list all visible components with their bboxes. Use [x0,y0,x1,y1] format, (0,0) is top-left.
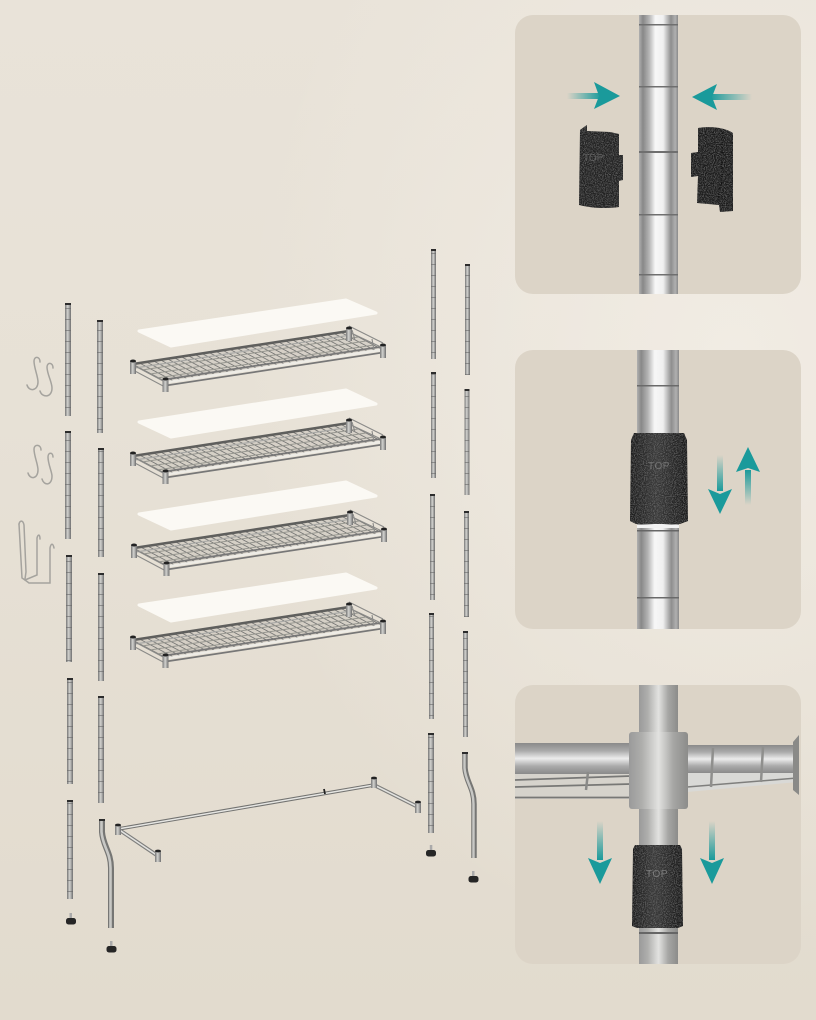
pole column: far right [462,264,478,882]
bent bottom pole [462,752,474,858]
arrow: down [700,821,724,884]
black sleeve [630,433,688,524]
icon: S hook 3 [28,445,41,478]
panel: clip halves attach [515,15,801,294]
corner post [371,777,377,788]
pole segment [431,372,436,478]
pole segment [97,320,103,433]
liner 2 [139,390,376,437]
left clip half [579,125,623,208]
sleeve marking: TOP [648,461,670,472]
panel background [515,685,801,964]
pole segment [67,678,73,784]
chrome shelf rail left [515,743,631,799]
pole segment [430,494,435,600]
pole segment [98,448,104,557]
pole segment [65,431,71,539]
chrome pole [637,350,679,629]
icon: S hook 1 [27,357,40,390]
icon: S hook 4 [42,453,53,484]
chrome pole [639,685,678,964]
pole segment [98,573,104,681]
pole segment [65,303,71,416]
arrow: down [708,455,732,514]
pole segment [431,249,436,359]
foot [66,913,76,924]
panel background [515,15,801,294]
wire shelf 2 [130,418,386,484]
panel: slide sleeve into place [515,350,801,629]
corner post [415,801,421,813]
icon: basket hook [19,521,54,583]
hooks [19,357,54,583]
arrow: down [588,821,612,884]
arrow: left [692,84,752,110]
bent bottom pole [99,819,111,928]
panel background [515,350,801,629]
foot [468,871,478,882]
black sleeve [632,845,683,928]
arrow: right [567,82,620,109]
shelf liners [139,300,376,621]
collar [629,732,688,809]
pole segment [67,800,73,899]
pole column: far left [65,303,76,924]
wire shelf 1 [130,326,386,392]
pole segment [464,389,470,495]
liner 3 [139,482,376,529]
pole segment [428,733,434,833]
pole segment [465,264,470,375]
pole segment [98,696,104,803]
right clip half [691,127,733,212]
base frame [115,777,421,862]
wire shelf 3 [131,510,387,576]
arrow: up [736,447,760,505]
chrome pole [639,15,678,294]
sleeve marking: TOP [646,869,668,880]
base rails [118,785,418,856]
pole segment [429,613,434,719]
wire shelves [130,326,387,668]
pole segment [464,511,469,617]
icon: S hook 2 [40,363,53,396]
pole column: second left [97,320,116,952]
liner 4 [139,574,376,621]
liner 1 [139,300,376,346]
foot [106,941,116,952]
pole lip [639,932,678,934]
pole segment [66,555,72,662]
panel: lower shelf onto sleeve [515,685,801,964]
chrome shelf rail right [687,735,799,795]
corner post [155,850,161,862]
pole column: second right [426,249,436,856]
corner post [115,824,121,835]
pole segment [463,631,468,737]
wire shelf 4 [130,602,386,668]
foot [426,845,436,856]
clip marking: TOP [583,153,604,164]
